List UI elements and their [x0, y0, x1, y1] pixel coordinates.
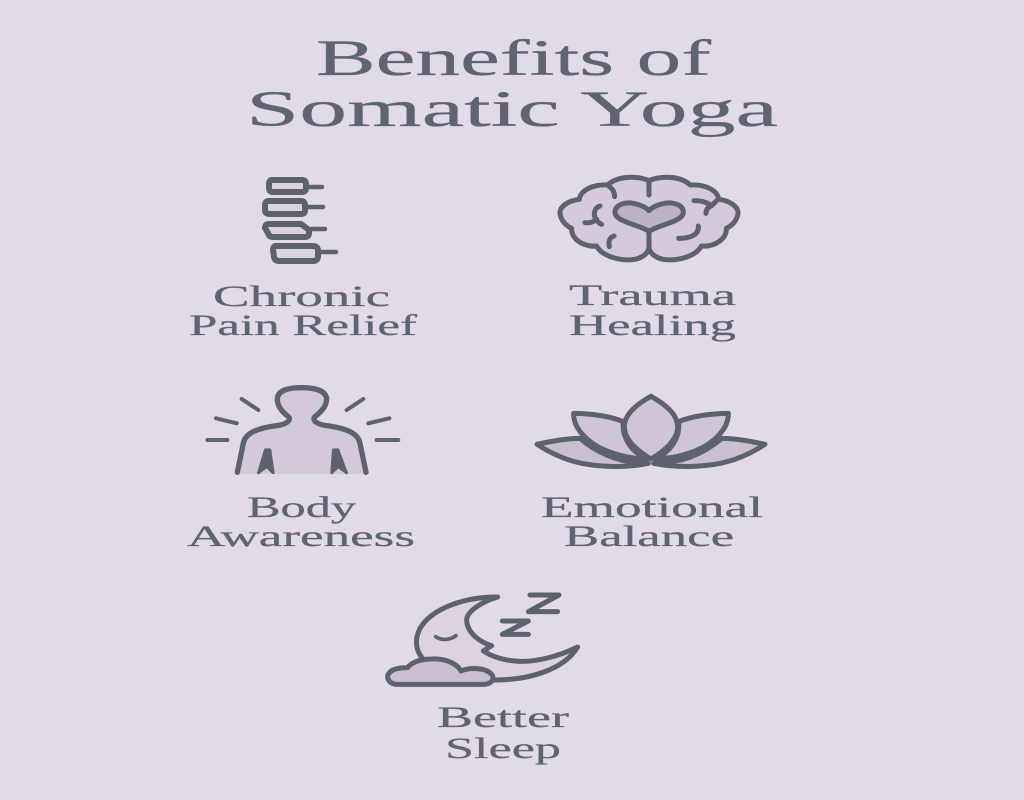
label: Better Sleep: Better — [437, 701, 569, 734]
label: Chronic Pain Relief: Chronic — [213, 280, 390, 313]
label: Body Awareness: Body — [247, 491, 356, 524]
label: Emotional Balance: Balance — [564, 520, 734, 553]
title — [246, 31, 778, 138]
label: Chronic Pain Relief: Pain Relief — [189, 309, 417, 342]
icon: brain with heart — [560, 177, 738, 260]
label: Emotional Balance — [541, 491, 763, 553]
rays — [207, 399, 398, 440]
title: Somatic Yoga — [246, 82, 778, 138]
body outline — [237, 388, 366, 472]
icon: body awareness — [207, 388, 398, 474]
title: Benefits of — [316, 31, 711, 87]
body fill — [237, 388, 367, 474]
arm lines — [258, 450, 347, 473]
label: Trauma Healing — [569, 279, 736, 342]
label: Trauma Healing: Healing — [569, 309, 736, 342]
label: Emotional Balance: Emotional — [541, 491, 763, 524]
label: Chronic Pain Relief — [189, 280, 417, 342]
label: Trauma Healing: Trauma — [569, 279, 736, 312]
label: Better Sleep — [437, 701, 569, 765]
icon: spine — [265, 180, 336, 261]
icon: lotus — [537, 396, 765, 466]
label: Body Awareness: Awareness — [187, 520, 415, 553]
icon: moon and cloud — [388, 595, 578, 684]
label: Better Sleep: Sleep — [445, 732, 561, 765]
label: Body Awareness — [187, 491, 415, 553]
